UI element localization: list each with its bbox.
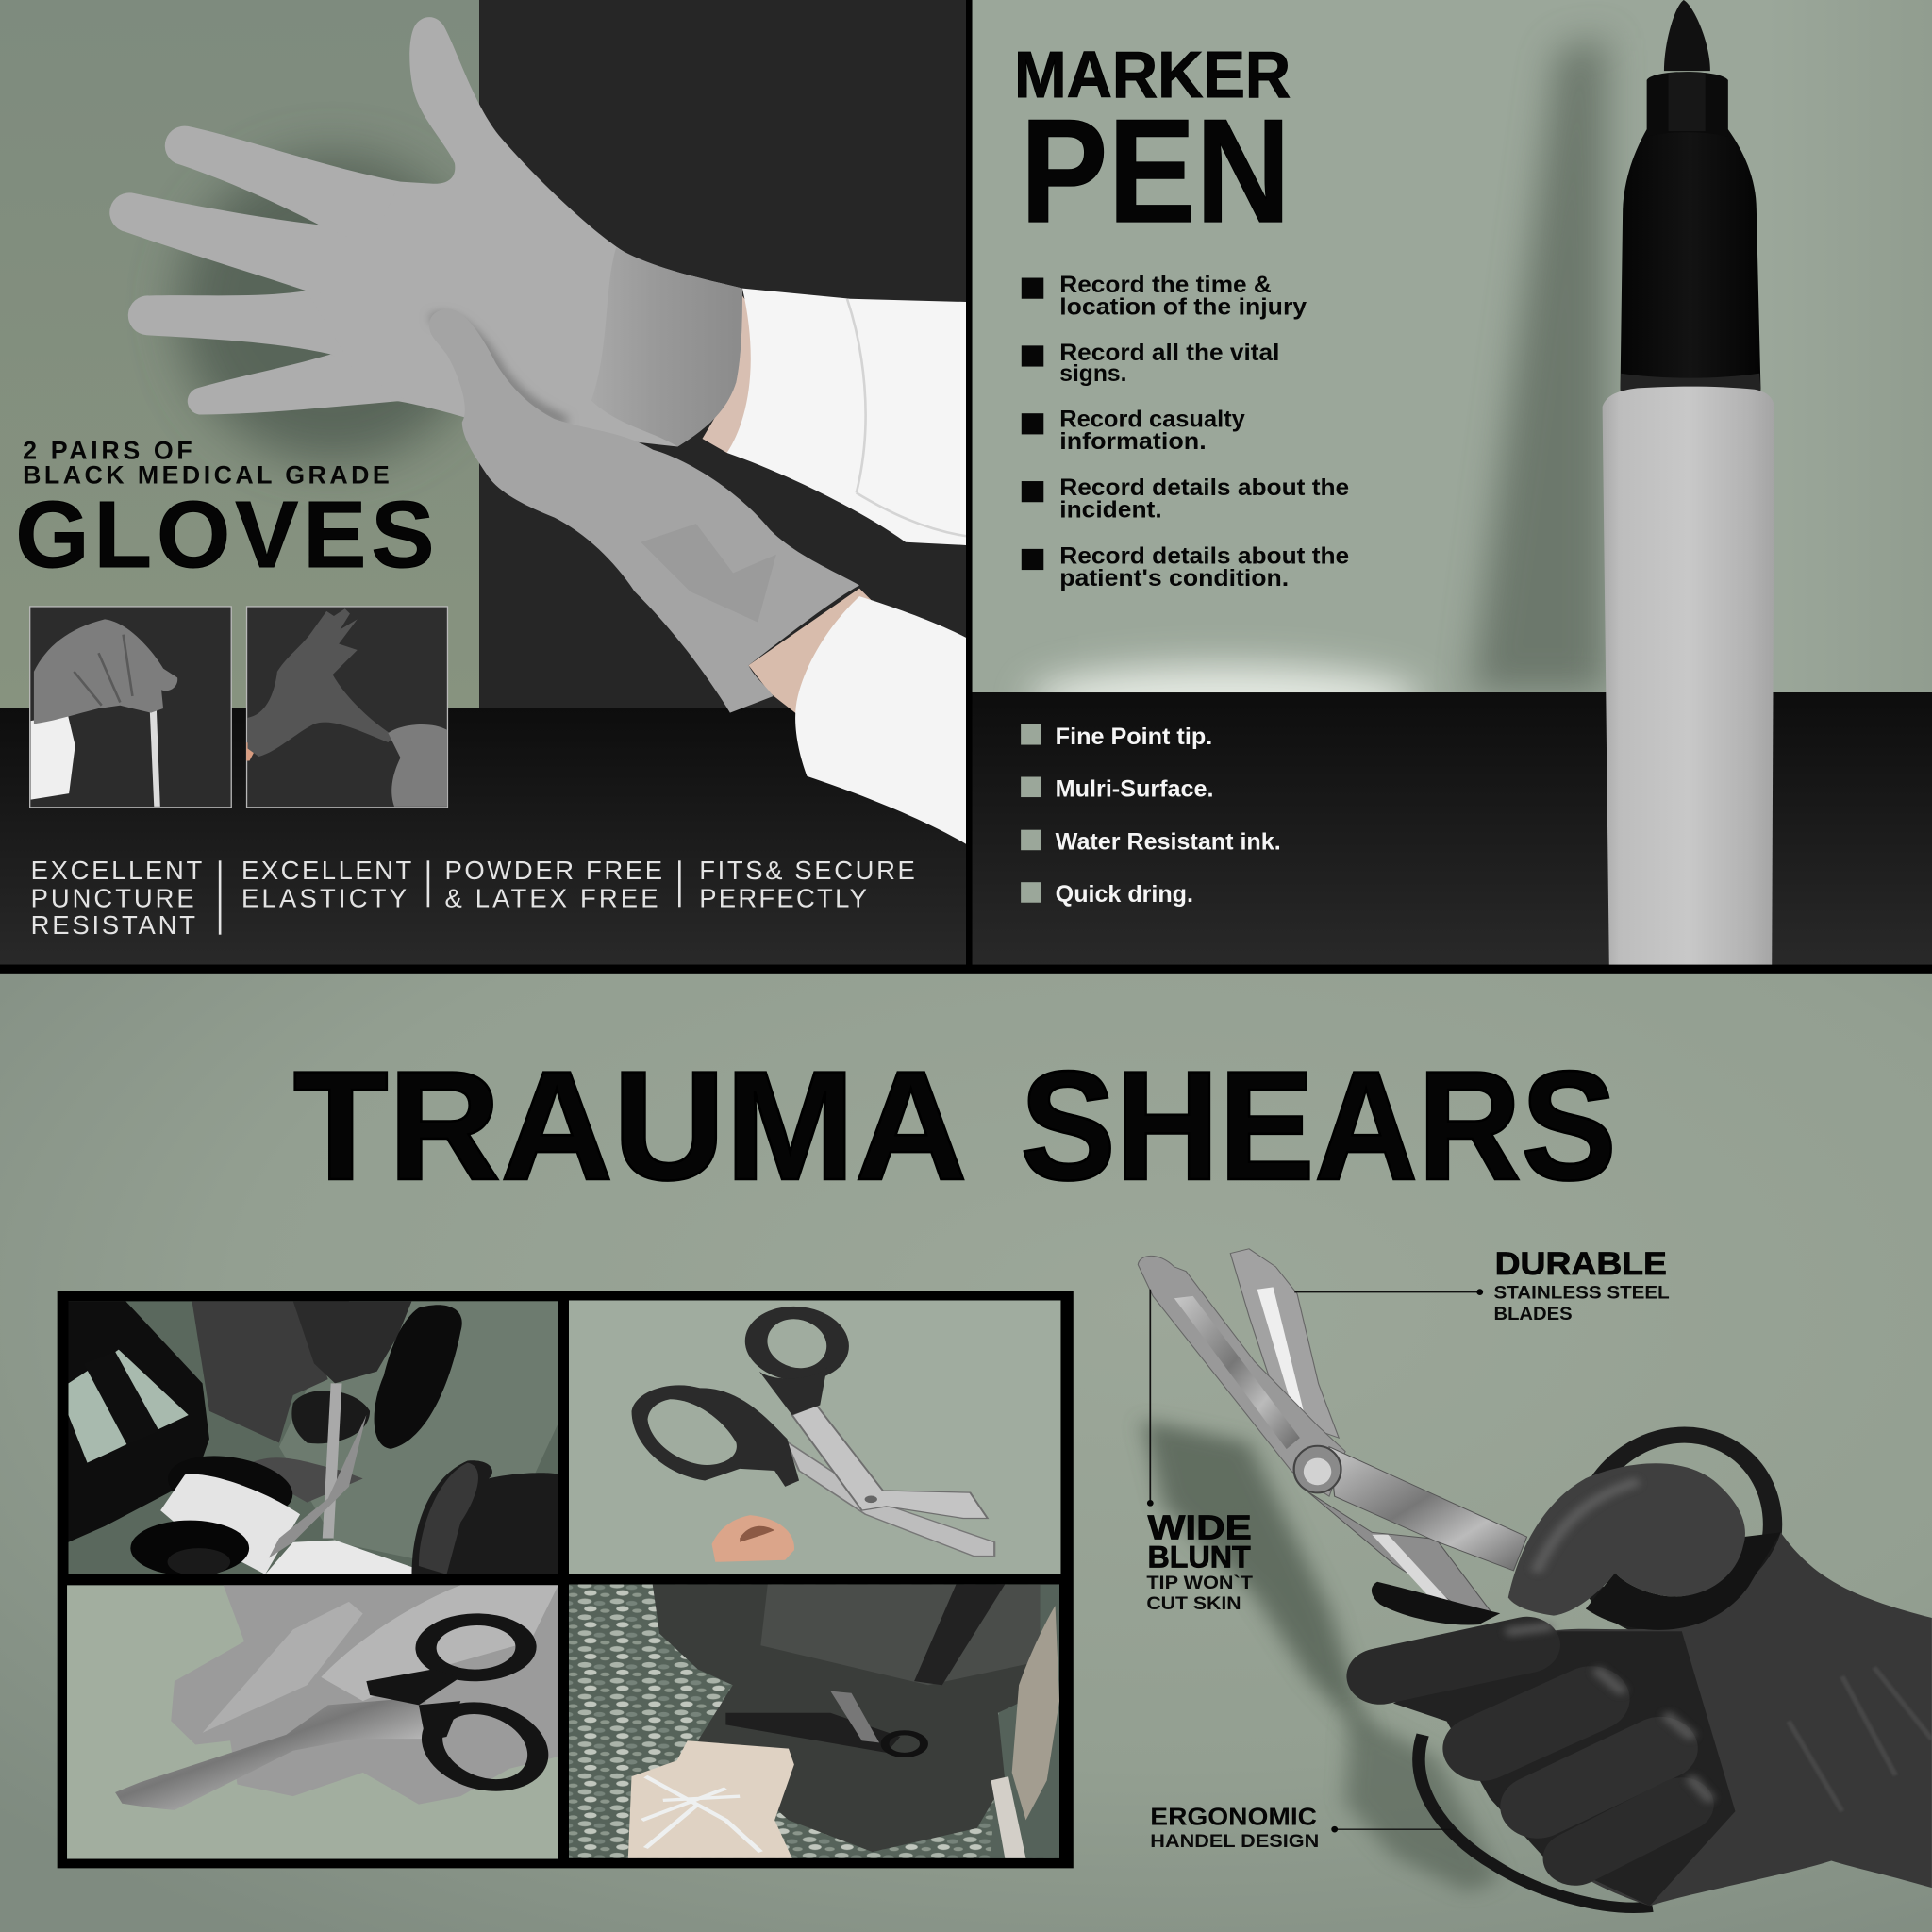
item 3 [1022, 408, 1245, 455]
upper sleeve [727, 289, 966, 545]
lower sleeve [795, 596, 966, 844]
feature 3: Water Resistant ink. [1056, 830, 1281, 856]
heading: marker pen [1014, 38, 1291, 254]
lower arm [1307, 1491, 1492, 1613]
thumb [1508, 1463, 1745, 1616]
item 2 [1022, 341, 1279, 387]
floor glow [1027, 665, 1422, 733]
callout: ergonomic: HANDEL DESIGN [1150, 1830, 1319, 1851]
horizontal divider [0, 965, 1932, 974]
photo: shears on gloves [67, 1585, 558, 1859]
callout: durable: DURABLE [1495, 1245, 1667, 1281]
callout: durable: STAINLESS STEEL [1493, 1283, 1670, 1303]
blade shadow [1142, 1420, 1372, 1744]
finger 1 [164, 126, 400, 225]
grip [1372, 1582, 1500, 1624]
bottom ring handle [1419, 1735, 1653, 1907]
callout: wide blunt: CUT SKIN [1146, 1594, 1241, 1613]
heading: trauma shears: SHEARS [1020, 1039, 1617, 1212]
little finger [1575, 1805, 1682, 1858]
pen collar [1647, 72, 1728, 137]
shears [1138, 1249, 1793, 1907]
subtitle [24, 441, 389, 484]
finger 2 [109, 192, 321, 293]
feature: powder free [445, 856, 662, 912]
back of hand [1548, 1532, 1932, 1906]
upper wrist [702, 296, 751, 453]
feature: puncture resistant: EXCELLENT [31, 856, 202, 885]
panel: marker pen [971, 0, 1932, 966]
item 5: Record details about the [1059, 544, 1349, 570]
panel: shears in gloved hand [1138, 1245, 1932, 1907]
black glove hand [1380, 1463, 1932, 1906]
upper arm [1329, 1447, 1527, 1571]
dark lower band [0, 708, 966, 965]
upper glove [109, 17, 742, 446]
feature 2: Mulri-Surface. [1056, 776, 1214, 802]
finger 4 [188, 355, 407, 415]
photo: puncture test [30, 607, 231, 808]
middle finger [1481, 1699, 1591, 1748]
photo: cutting bandage [68, 1301, 558, 1576]
finger 3 [128, 291, 345, 355]
feature: puncture resistant: PUNCTURE [31, 883, 194, 912]
feature: puncture resistant: RESISTANT [31, 910, 195, 940]
item 1: location of the injury [1059, 295, 1307, 321]
heading: gloves: GLOVES [15, 482, 434, 588]
ring base [1586, 1532, 1781, 1630]
photo: backpack with boots [569, 1584, 1059, 1858]
upper glove cuff [591, 248, 742, 446]
vertical divider [966, 0, 973, 966]
subtitle: 2 PAIRS OF [23, 437, 192, 465]
item 5: patient's condition. [1059, 566, 1289, 591]
callout: wide blunt: WIDE [1147, 1509, 1252, 1547]
heading: trauma shears: TRAUMA [293, 1039, 967, 1212]
dark lower band [971, 692, 1932, 966]
pivot screw [1294, 1446, 1341, 1492]
callout: ergonomic [1150, 1804, 1457, 1851]
feature: fit [699, 856, 915, 912]
feature 4: Quick dring. [1056, 882, 1193, 908]
item 4: Record details about the [1059, 475, 1349, 501]
feature 1: Fine Point tip. [1056, 724, 1212, 750]
right blade [1230, 1249, 1339, 1438]
item 3: Record casualty [1059, 408, 1245, 433]
subtitle: BLACK MEDICAL GRADE [23, 461, 390, 490]
grid frame [58, 1291, 1074, 1868]
feature: powder free: & LATEX FREE [445, 883, 658, 912]
callout: durable: BLADES [1493, 1305, 1573, 1324]
callout: wide blunt: TIP WON`T [1146, 1574, 1253, 1593]
pen tip [1664, 0, 1710, 71]
feature: fit: PERFECTLY [699, 883, 867, 912]
item 1: Record the time & [1059, 273, 1272, 298]
lower hand wrist [749, 589, 872, 713]
fist mass [1393, 1631, 1735, 1906]
panel: trauma shears background [0, 974, 1932, 1932]
hand shadow [1345, 1712, 1500, 1892]
feature: elasticity: EXCELLENT [242, 856, 411, 885]
ring finger [1538, 1748, 1660, 1807]
photo: trauma shears flat lay [569, 1300, 1060, 1574]
photo: elasticity test [246, 607, 447, 808]
item 3: information. [1059, 429, 1207, 455]
item 5 [1022, 544, 1349, 591]
heading: marker pen: PEN [1020, 89, 1291, 254]
list: pen features [1021, 724, 1281, 908]
item 2: Record all the vital [1059, 341, 1279, 366]
feature: elasticity: ELASTICTY [242, 883, 407, 912]
sage background block [0, 0, 479, 708]
pen body [1603, 387, 1774, 966]
item 4: incident. [1059, 498, 1162, 524]
feature: elasticity [242, 856, 411, 912]
lower thumb soft shadow [431, 318, 567, 422]
hand shadow [178, 154, 487, 462]
right side shade [1767, 0, 1932, 692]
heading: marker pen: MARKER [1014, 38, 1291, 111]
feature: powder free: POWDER FREE [445, 856, 662, 885]
callout: durable [1294, 1245, 1670, 1324]
palm and thumb [307, 17, 742, 446]
item 2: signs. [1059, 361, 1126, 387]
glove creases [1789, 1667, 1932, 1811]
left blade [1138, 1256, 1345, 1496]
lower glove creases [641, 524, 776, 623]
knuckle highlights [1511, 1483, 1708, 1798]
dark background block [479, 0, 966, 708]
heading: trauma shears [293, 1039, 1617, 1212]
icon: marker pen [1603, 0, 1774, 966]
lower glove [429, 309, 859, 713]
item 4 [1022, 475, 1349, 524]
photo grid [58, 1291, 1074, 1868]
list: record uses [1022, 273, 1349, 591]
pen shoulder [1621, 129, 1760, 393]
sleeve cuff fold [847, 299, 966, 536]
item 1 [1022, 273, 1307, 321]
top ring handle [1559, 1420, 1793, 1645]
panel: gloves [0, 0, 966, 965]
callout: wide blunt [1146, 1290, 1253, 1613]
pen shadow [1472, 37, 1607, 692]
pen band [1621, 374, 1760, 394]
index finger [1380, 1645, 1527, 1676]
callout: ergonomic: ERGONOMIC [1150, 1804, 1317, 1831]
feature: fit: FITS& SECURE [699, 856, 915, 885]
callout: wide blunt: BLUNT [1147, 1540, 1251, 1574]
sage background [971, 0, 1932, 692]
feature: puncture resistant [32, 860, 202, 934]
